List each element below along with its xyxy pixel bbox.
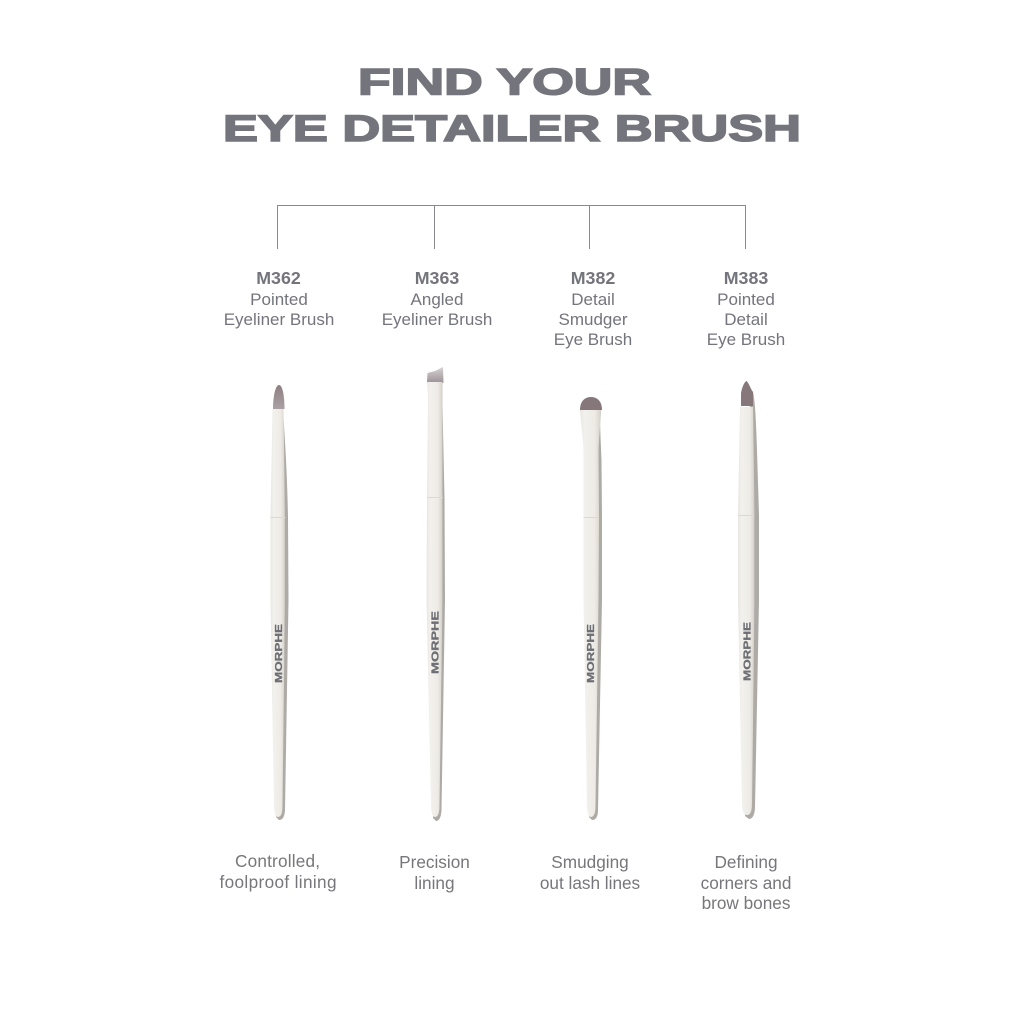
brush: M383 — [738, 381, 759, 819]
label: M382: Smudger — [559, 310, 628, 329]
description: M382 — [540, 852, 640, 893]
brush: M382: MORPHE — [585, 624, 597, 683]
description: M383: brow bones — [702, 893, 790, 913]
description: M382: out lash lines — [540, 873, 640, 893]
brush: M383: MORPHE — [741, 622, 753, 681]
label: M383 — [707, 268, 785, 349]
description: M383: Defining — [714, 852, 778, 872]
brush: M362 — [270, 385, 288, 820]
bracket connector lines — [278, 206, 746, 249]
title — [223, 60, 801, 149]
description: M363: lining — [414, 873, 455, 893]
label: M382: Detail — [571, 290, 615, 309]
label: M383: Pointed — [717, 290, 775, 309]
label: M382: Eye Brush — [554, 330, 632, 349]
label: M382 — [554, 268, 632, 349]
description: M383 — [701, 852, 791, 913]
label: M363: Angled — [411, 290, 463, 309]
brush: M382 — [580, 397, 602, 820]
label: M382: M382 — [571, 268, 615, 288]
brush: M362: MORPHE — [273, 624, 285, 683]
description: M362: Controlled, — [235, 851, 320, 871]
description: M362 — [220, 851, 336, 892]
description: M363: Precision — [399, 852, 470, 872]
label: M363 — [382, 268, 492, 329]
label: M383: Eye Brush — [707, 330, 785, 349]
brush: M363: MORPHE — [429, 611, 441, 674]
brush: M363 — [426, 367, 445, 821]
label: M383: M383 — [724, 268, 768, 288]
title: FIND YOUR — [358, 60, 651, 102]
label: M363: Eyeliner Brush — [382, 310, 492, 329]
label: M383: Detail — [724, 310, 768, 329]
label: M362: Pointed — [250, 290, 308, 309]
description: M363 — [399, 852, 470, 893]
title: EYE DETAILER BRUSH — [223, 107, 801, 149]
description: M383: corners and — [701, 873, 791, 893]
description: M362: foolproof lining — [220, 872, 336, 892]
label: M363: M363 — [415, 268, 459, 288]
description: M382: Smudging — [551, 852, 629, 872]
label: M362: M362 — [256, 268, 301, 288]
label: M362: Eyeliner Brush — [224, 310, 334, 329]
label: M362 — [224, 268, 334, 329]
